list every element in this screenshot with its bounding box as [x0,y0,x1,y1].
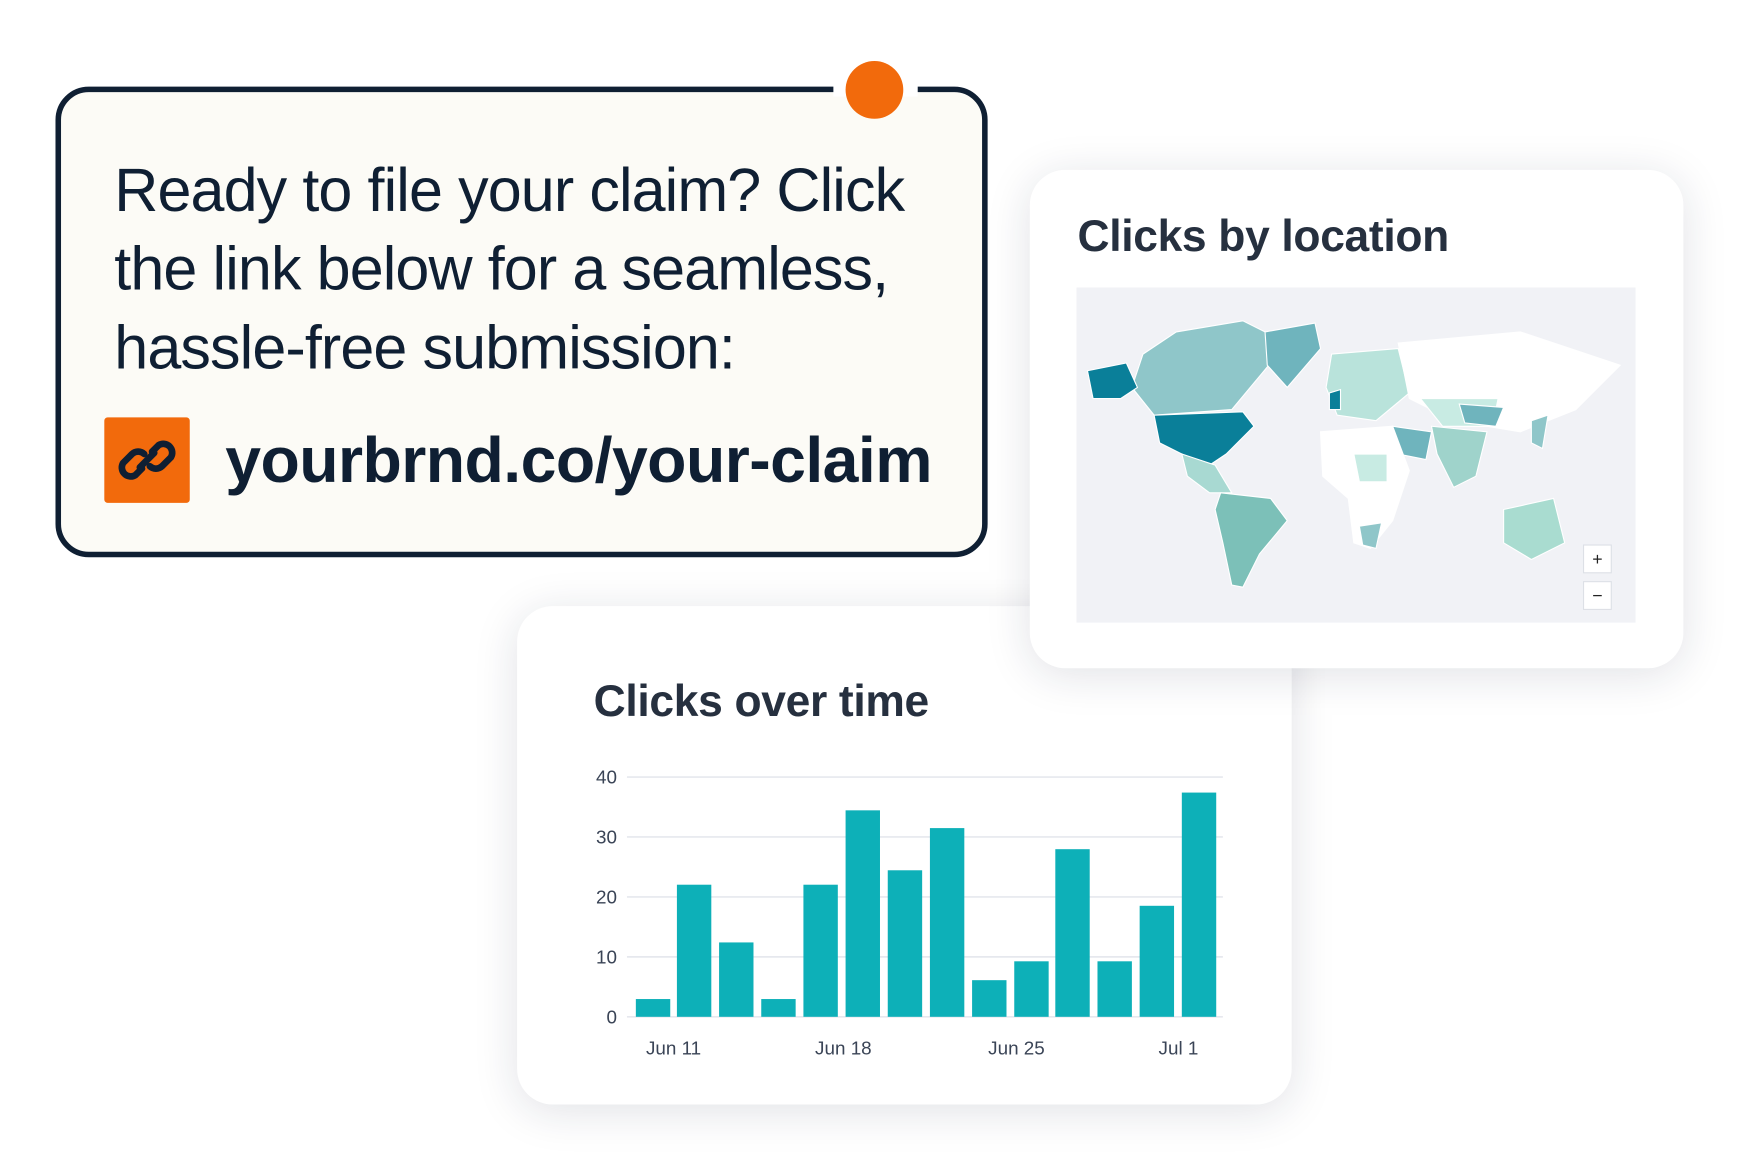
world map: − [1592,586,1603,606]
heading: clicks over time: Clicks over time [594,677,929,726]
bar chart: 40 [596,767,617,788]
heading: clicks by location: Clicks by location [1078,212,1449,261]
bar chart [596,767,1223,1059]
border gap behind dot [833,83,918,97]
panel: chart card [517,606,1292,1104]
world map: + [1592,549,1603,569]
text: message: hassle-free submission: [114,313,735,382]
panel: map card [1030,170,1683,668]
bar chart: 10 [596,947,617,968]
text: link url: yourbrnd.co/your-claim [225,424,932,496]
icon: orange dot [846,61,903,119]
bar chart: Jul 1 [1159,1038,1198,1059]
bar chart: Jun 25 [988,1038,1045,1059]
bar chart: 30 [596,827,617,848]
text: message: the link below for a seamless, [114,234,888,303]
world map [1076,288,1636,622]
text: message: Ready to file your claim? Click [114,155,904,224]
bar chart: 20 [596,887,617,908]
bar chart: 0 [606,1006,617,1027]
bar chart: Jun 11 [646,1038,701,1059]
callout: claim message [55,87,988,557]
bar chart: Jun 18 [815,1038,872,1059]
icon: link [104,417,190,503]
text: message [114,155,906,382]
